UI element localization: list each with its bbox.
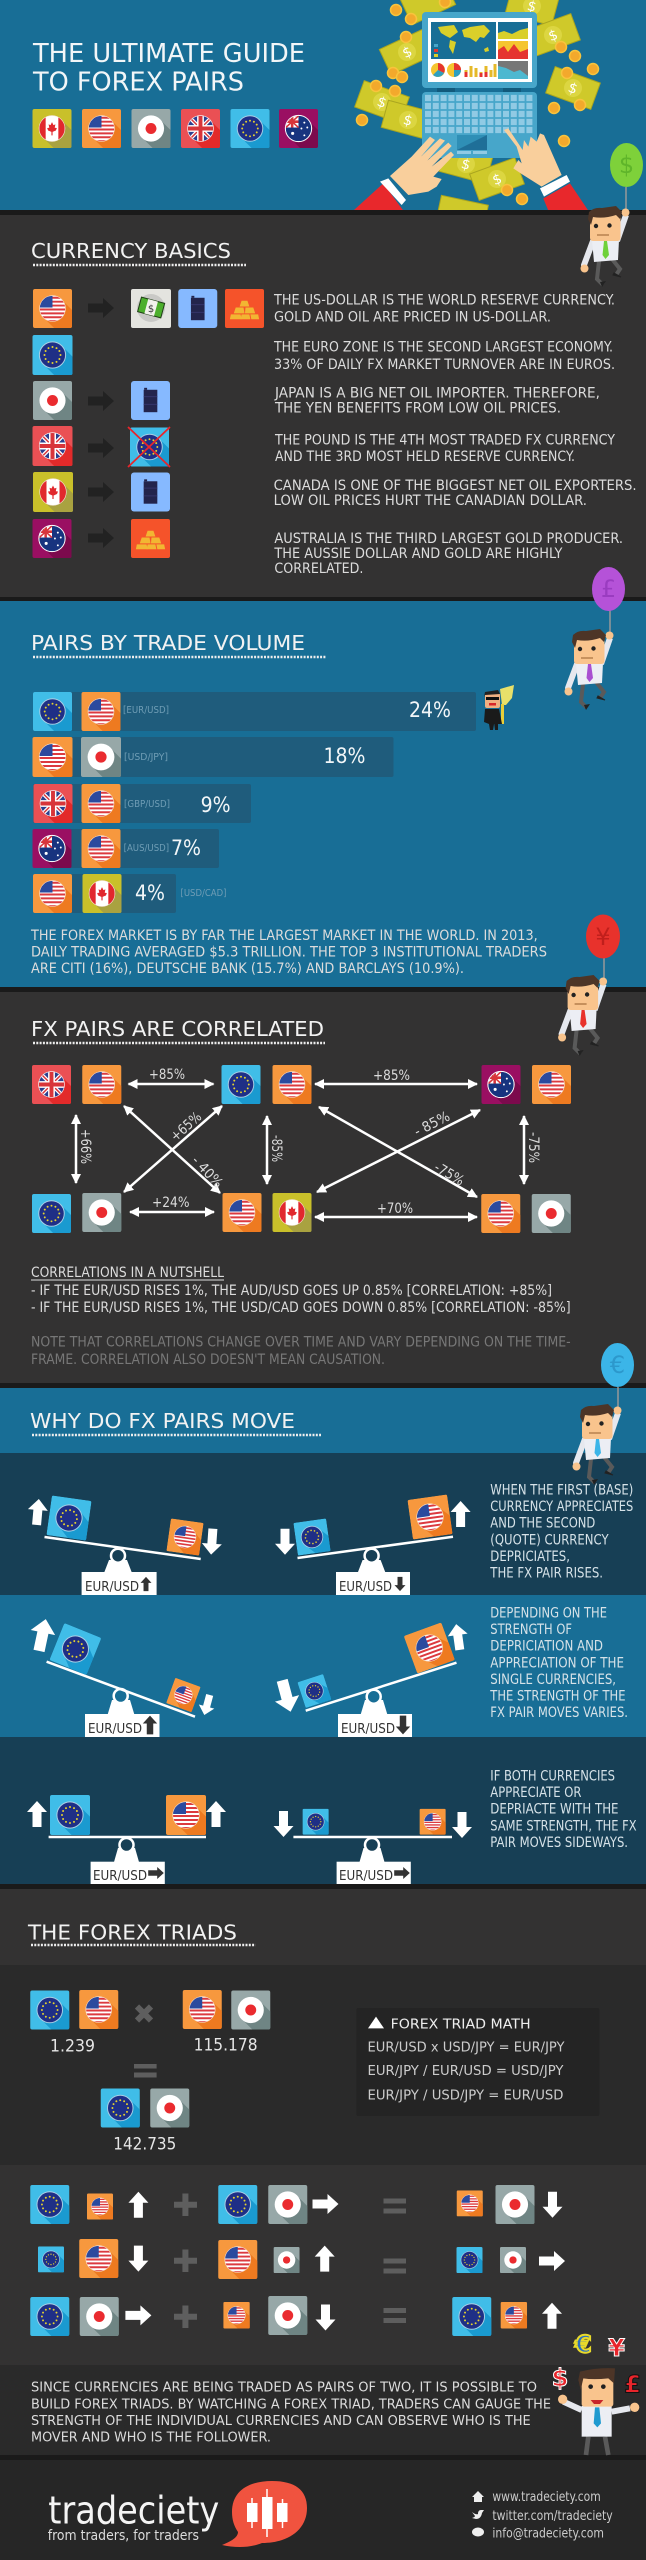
pair: GBP/USD (32, 1065, 121, 1104)
character: man with red yen balloon: ¥ (595, 923, 611, 951)
seesaw: EUR up USD down: EUR/USD (85, 1580, 139, 1595)
bar: USD/CAD 4%: [USD/CAD] (180, 888, 226, 899)
text: correlations in a nutshell: CORRELATIONS IN A NUTSHELL (31, 1264, 225, 1281)
row: yen (33, 381, 600, 420)
illustration: money bills and coins: $ (490, 171, 504, 189)
text: second explanation: DEPENDING ON THE (490, 1604, 607, 1621)
equation: triad example: 142.735 (113, 2135, 176, 2155)
character: juggling man with currency symbols: € (574, 2331, 592, 2359)
heading: the forex triads: THE FOREX TRIADS (27, 1921, 237, 1945)
text: forex market paragraph: THE FOREX MARKET IS BY FAR THE LARGEST MARKET IN THE WORLD. IN 2013, (30, 927, 538, 944)
seesaw: EUR strongly up (27, 1617, 217, 1737)
title: THE ULTIMATE GUIDE (32, 39, 305, 69)
seesaw: EUR up USD down (27, 1495, 223, 1595)
title: TO FOREX PAIRS (32, 68, 244, 98)
heading: pairs by trade volume: PAIRS BY TRADE VOLUME (31, 631, 305, 655)
seesaw: both up (27, 1795, 226, 1884)
heading: why do fx pairs move: WHY DO FX PAIRS MOVE (30, 1409, 295, 1433)
seesaw: USD strongly up (270, 1622, 470, 1737)
illustration: money bills and coins: $ (546, 27, 560, 45)
bar: AUS/USD 7%: [AUS/USD] (124, 843, 169, 854)
character: man with purple pound balloon: £ (601, 575, 616, 603)
bar: USD/CAD 4%: 4% (135, 881, 165, 905)
contact details: www.tradeciety.com (492, 2490, 601, 2505)
text: forex market paragraph: DAILY TRADING AVERAGED $5.3 TRILLION. THE TOP 3 INSTITUTIONAL TRADERS (31, 944, 547, 961)
bar: EUR/USD 24% (33, 692, 476, 731)
row: yen: JAPAN IS A BIG NET OIL IMPORTER. THEREFORE, (274, 385, 600, 402)
text: triads paragraph: STRENGTH OF THE INDIVIDUAL CURRENCIES AND CAN OBSERVE WHO IS THE (31, 2413, 531, 2429)
panel: the forex triads (0, 1884, 646, 2455)
contact details (472, 2490, 613, 2542)
heading: fx pairs are correlated: FX PAIRS ARE CORRELATED (31, 1017, 324, 1041)
text: second explanation: SINGLE CURRENCIES, (490, 1671, 616, 1688)
arrows and correlation values: -75% (525, 1132, 541, 1163)
row: yen: THE YEN BENEFITS FROM LOW OIL PRICES. (274, 400, 561, 417)
bar: EUR/USD 24%: [EUR/USD] (123, 705, 169, 716)
text: correlation note (31, 1334, 571, 1368)
bar: USD/JPY 18%: [USD/JPY] (124, 752, 168, 763)
title (32, 39, 305, 98)
bar: AUS/USD 7%: 7% (171, 836, 201, 860)
arrows and correlation values: - 85% (412, 1109, 453, 1140)
row: pound: AND THE 3RD MOST HELD RESERVE CURRENCY. (275, 448, 575, 465)
arrows and correlation values: +85% (149, 1067, 185, 1083)
bar: GBP/USD 9%: 9% (201, 793, 231, 817)
pair: EUR/USD (222, 1065, 312, 1104)
character: man with blue euro balloon (572, 1343, 634, 1485)
text: correlation note: FRAME. CORRELATION ALSO DOESN'T MEAN CAUSATION. (31, 1351, 385, 1368)
pair: AUD/USD (482, 1065, 571, 1104)
equation: triad example (30, 1990, 270, 2155)
row: us dollar (33, 289, 615, 328)
row: australian dollar (32, 519, 623, 577)
character: juggling man with currency symbols: £ (624, 2371, 641, 2399)
panel: forex triad math: EUR/JPY / USD/JPY = EUR/USD (368, 2088, 564, 2104)
illustration: money bills and coins: $ (400, 44, 415, 62)
panel: currency basics (0, 210, 646, 597)
illustration: money bills and coins: $ (375, 94, 389, 112)
row: australian dollar: THE AUSSIE DOLLAR AND GOLD ARE HIGHLY (274, 545, 562, 562)
illustration: hands (353, 128, 588, 211)
text: second explanation: DEPRICIATION AND (490, 1638, 603, 1655)
text: second explanation: STRENGTH OF (490, 1621, 572, 1638)
text: first explanation (489, 1481, 633, 1581)
seesaw: EUR strongly up: EUR/USD (88, 1722, 142, 1737)
row: us dollar: GOLD AND OIL ARE PRICED IN US-DOLLAR. (274, 309, 551, 326)
bar: AUS/USD 7% (32, 829, 219, 868)
arrows and correlation values: +70% (377, 1201, 413, 1217)
arrows and correlation values (76, 1067, 541, 1217)
text: triads paragraph: MOVER AND WHO IS THE FOLLOWER. (31, 2430, 271, 2446)
bar: USD/JPY 18%: 18% (324, 744, 366, 768)
illustration: money bills and coins: $ (401, 112, 414, 130)
illustration: money bills and coins: $ (566, 80, 580, 98)
text: first explanation: THE FX PAIR RISES. (489, 1564, 603, 1581)
text: first explanation: DEPRICIATES, (490, 1548, 570, 1565)
bar: GBP/USD 9%: [GBP/USD] (124, 799, 170, 810)
text: triads paragraph (31, 2380, 551, 2446)
triad row 2 (38, 2239, 565, 2279)
seesaw: both down: EUR/USD (339, 1869, 393, 1884)
triad row 1 (30, 2185, 562, 2224)
panel: fx pairs are correlated (0, 987, 646, 1383)
panel: why do fx pairs move (0, 1383, 646, 1884)
panel: pairs by trade volume (0, 597, 646, 987)
illustration: laptop (422, 12, 537, 158)
arrows and correlation values: +66% (77, 1129, 93, 1164)
currency flag row (32, 109, 318, 148)
arrows and correlation values: +65% (168, 1109, 205, 1145)
panel: forex triad math: EUR/JPY / EUR/USD = USD/JPY (368, 2063, 564, 2079)
pair: USD/CAD (222, 1193, 312, 1232)
equation: triad example: 1.239 (50, 2036, 95, 2056)
seesaw: USD strongly up: EUR/USD (341, 1722, 395, 1737)
panel: footer (0, 2455, 646, 2560)
text: correlations in a nutshell (31, 1264, 571, 1316)
arrows and correlation values: -75% (431, 1160, 467, 1189)
character: man with blue euro balloon: € (610, 1351, 625, 1379)
illustration: money bills and coins: $ (459, 156, 472, 174)
contact details: info@tradeciety.com (492, 2527, 604, 2542)
icon: man with trophy (484, 685, 514, 730)
pair: EUR/JPY (32, 1193, 121, 1233)
panel: header (0, 0, 646, 233)
text: first explanation: (QUOTE) CURRENCY (490, 1531, 609, 1548)
pair: USD/JPY (481, 1194, 571, 1233)
text: triads paragraph: SINCE CURRENCIES ARE BEING TRADED AS PAIRS OF TWO, IT IS POSSIBLE TO (31, 2380, 537, 2396)
text: correlations in a nutshell: - IF THE EUR/USD RISES 1%, THE AUD/USD GOES UP 0.85% [CORRELATION: +85%] (31, 1282, 552, 1299)
row: canadian dollar: LOW OIL PRICES HURT THE CANADIAN DOLLAR. (274, 492, 587, 509)
bar: USD/JPY 18% (32, 737, 394, 777)
seesaw: EUR down USD up: EUR/USD (339, 1580, 392, 1595)
panel: forex triad math: EUR/USD x USD/JPY = EUR/JPY (368, 2040, 565, 2056)
panel: forex triad math (356, 2008, 599, 2116)
arrows and correlation values: -85% (268, 1135, 284, 1162)
character: juggling man with currency symbols: ¥ (608, 2334, 625, 2362)
text: correlations in a nutshell: - IF THE EUR/USD RISES 1%, THE USD/CAD GOES DOWN 0.85% [CORRELATION: -85%] (31, 1299, 571, 1316)
arrows and correlation values: - 40% (188, 1153, 226, 1192)
icon: speech bubble with candlesticks (222, 2481, 307, 2547)
text: third explanation: IF BOTH CURRENCIES (490, 1767, 615, 1784)
character: man with red yen balloon (558, 914, 620, 1056)
text: triads paragraph: BUILD FOREX TRIADS. BY WATCHING A FOREX TRIAD, TRADERS CAN GAUGE THE (31, 2396, 551, 2412)
arrows and correlation values: +85% (373, 1068, 410, 1084)
text: forex market paragraph (30, 927, 547, 977)
icon: money (131, 289, 171, 328)
illustration: money bills and coins (355, 0, 600, 233)
seesaw: EUR down USD up (275, 1494, 471, 1595)
logo: tradeciety (48, 2481, 307, 2547)
character: juggling man with currency symbols (552, 2331, 641, 2455)
text: third explanation (490, 1767, 637, 1851)
correlation chart (32, 1065, 571, 1233)
text: third explanation: DEPRIACTE WITH THE (490, 1801, 618, 1818)
heading: currency basics: CURRENCY BASICS (31, 239, 231, 263)
arrows and correlation values: +24% (152, 1195, 190, 1211)
text: correlation note: NOTE THAT CORRELATIONS CHANGE OVER TIME AND VARY DEPENDING ON THE TIME- (31, 1334, 571, 1351)
text: second explanation (490, 1604, 628, 1721)
character: man with green dollar balloon (580, 143, 643, 287)
triad row 3 (30, 2296, 562, 2336)
contact details: twitter.com/tradeciety (492, 2509, 613, 2524)
bar: USD/CAD 4% (33, 874, 226, 913)
panel: forex triad math: FOREX TRIAD MATH (391, 2016, 531, 2032)
text: first explanation: AND THE SECOND (490, 1515, 595, 1532)
row: canadian dollar (33, 472, 637, 512)
text: third explanation: APPRECIATE OR (490, 1784, 581, 1801)
bar: GBP/USD 9% (33, 784, 251, 823)
row: pound (32, 426, 615, 467)
character: man with green dollar balloon: $ (619, 151, 634, 179)
text: forex market paragraph: ARE CITI (16%), DEUTSCHE BANK (15.7%) AND BARCLAYS (10.9%). (31, 960, 464, 977)
icon: money: $ (148, 304, 154, 315)
logo: tradeciety: tradeciety (48, 2488, 219, 2532)
bar: EUR/USD 24%: 24% (409, 698, 451, 722)
equation: triad example: 115.178 (194, 2036, 258, 2056)
row: australian dollar: CORRELATED. (274, 560, 363, 577)
logo: tradeciety: from traders, for traders (48, 2528, 199, 2544)
seesaw: both down (274, 1809, 472, 1884)
row: euro (32, 335, 615, 375)
character: juggling man with currency symbols: $ (552, 2364, 568, 2392)
seesaw: both up: EUR/USD (93, 1869, 147, 1884)
character: man with purple pound balloon (564, 567, 625, 710)
